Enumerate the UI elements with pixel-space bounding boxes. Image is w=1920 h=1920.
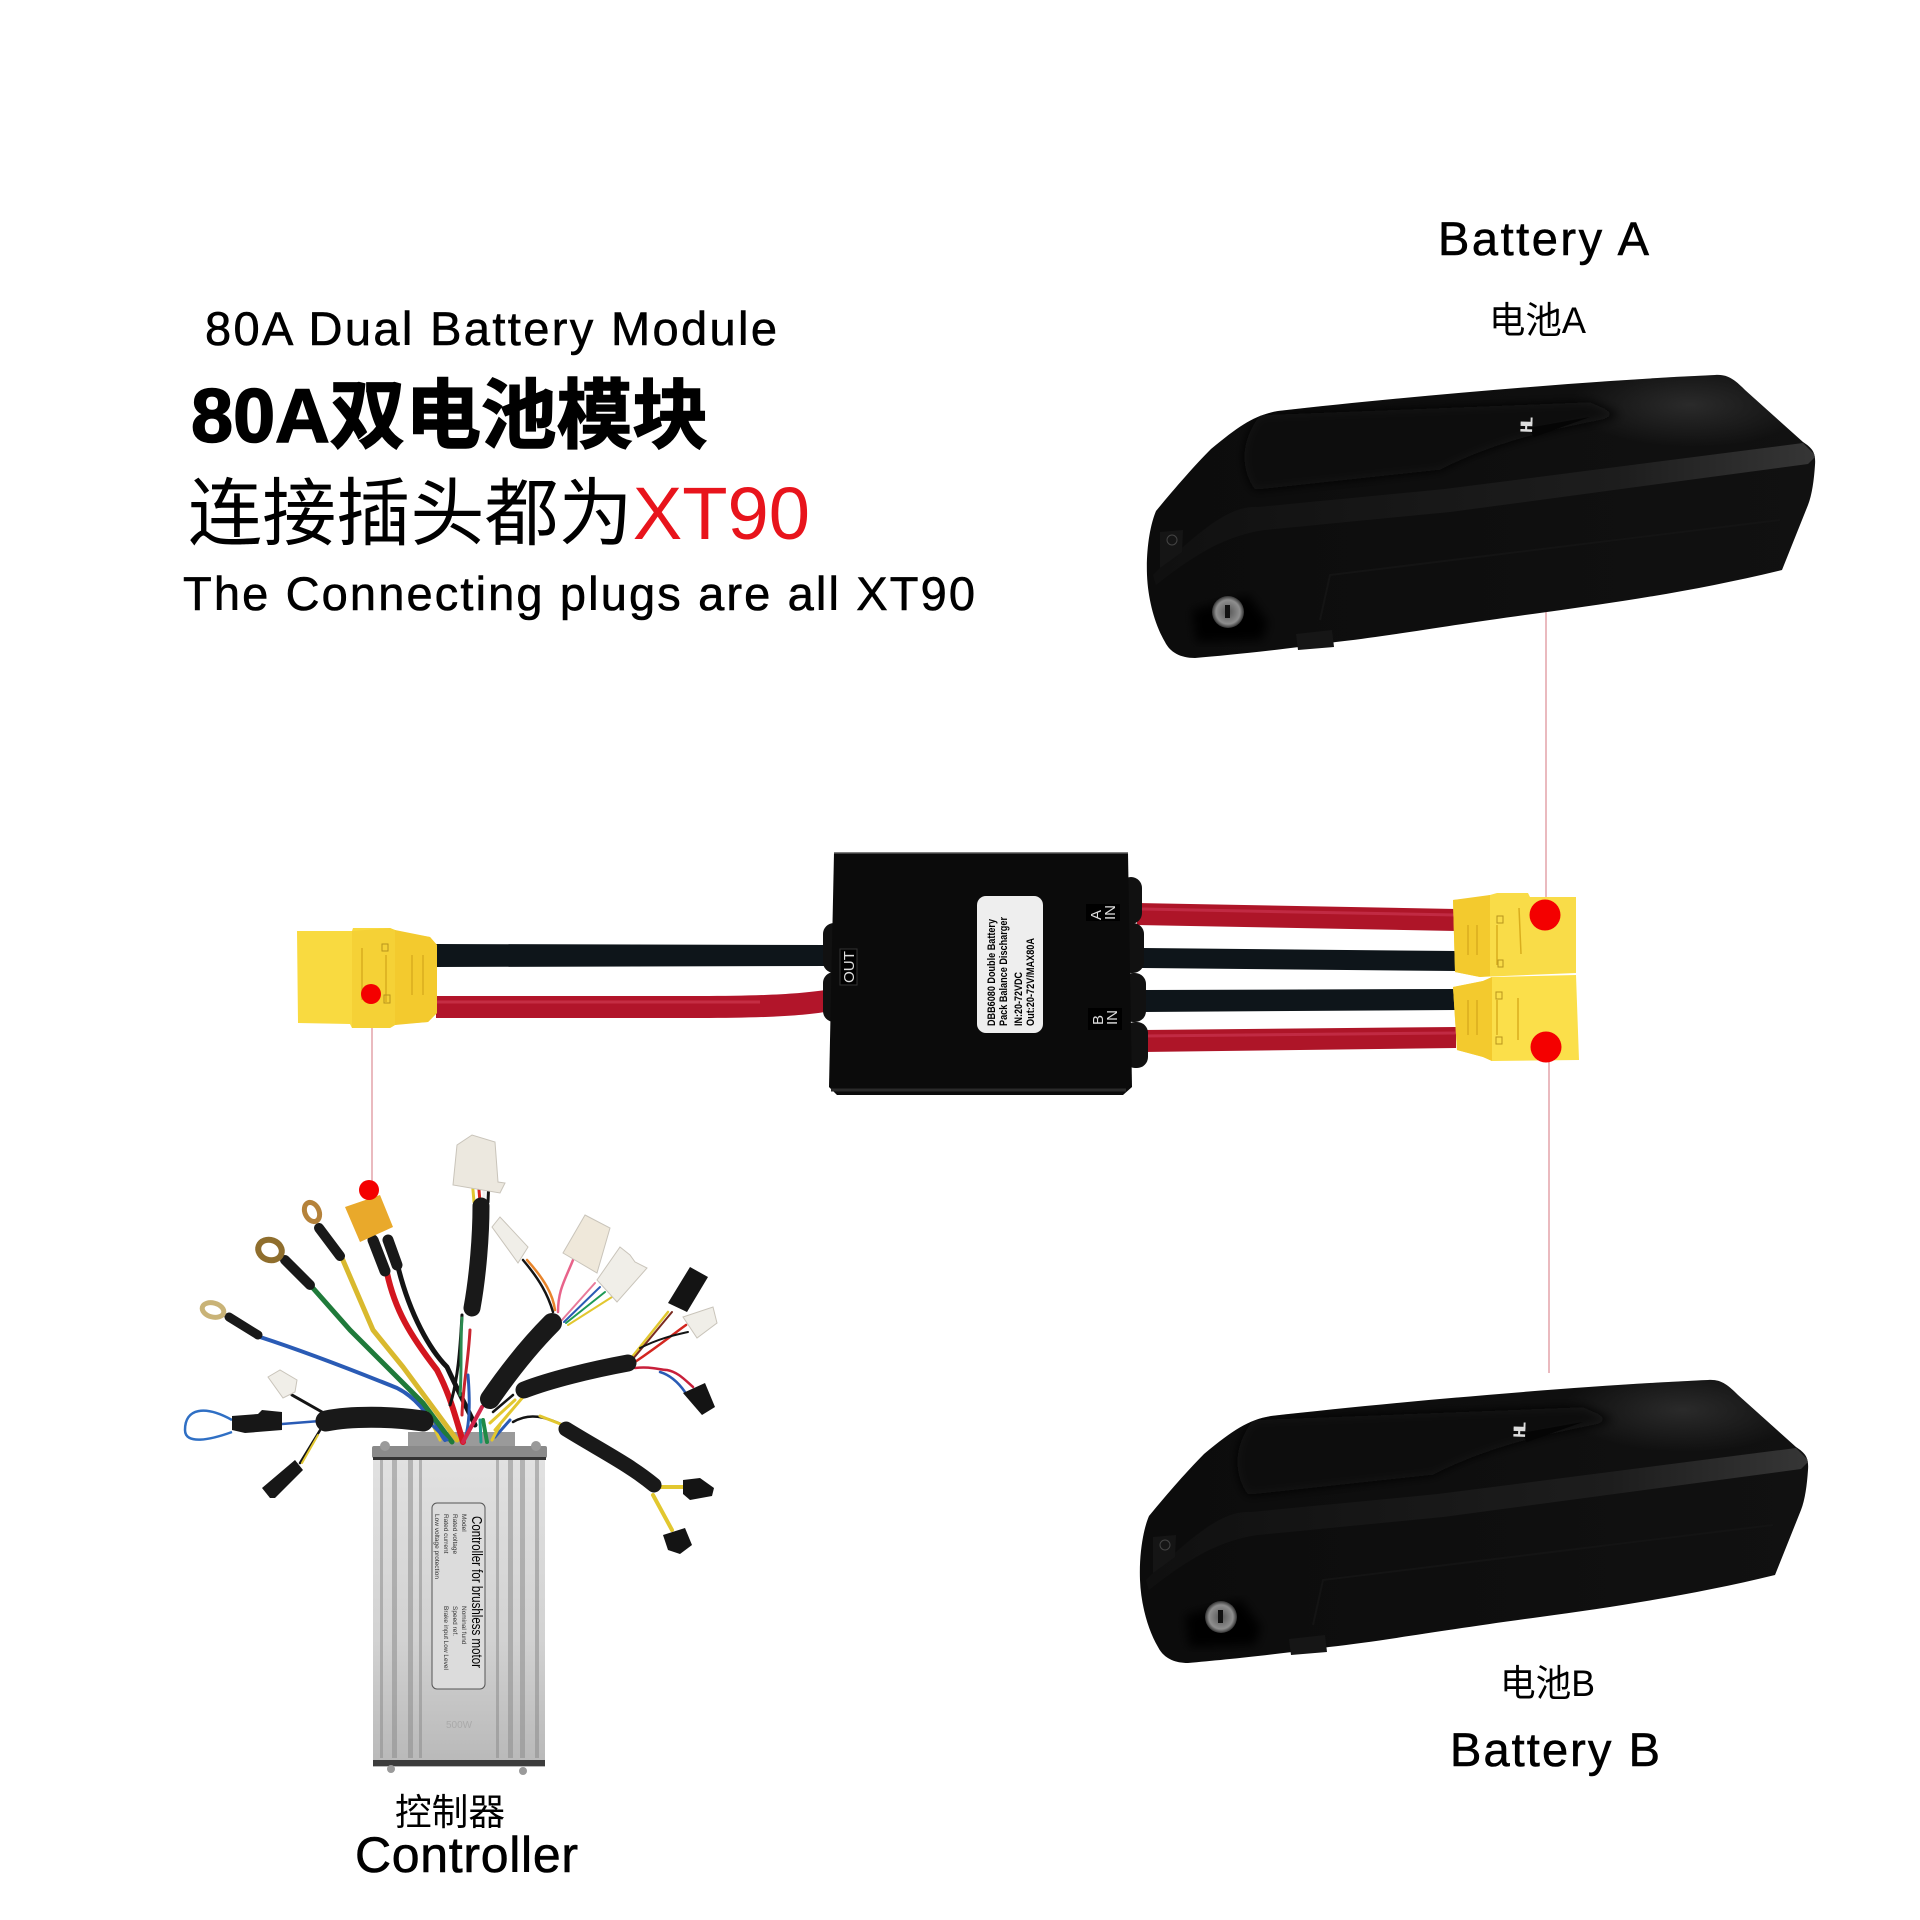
black connector: right top (668, 1267, 708, 1312)
controller with wire harness (185, 1135, 717, 1775)
product label: Out:20-72V/MAX80A (1025, 938, 1037, 1026)
black wire A (1140, 948, 1456, 971)
module casing (829, 853, 1132, 1095)
blue wire loop (185, 1411, 232, 1440)
chinese plug note: 连接插头都为XT90 (188, 472, 810, 555)
english subtitle: 80A Dual Battery Module (205, 302, 777, 355)
tag: A IN: A (1088, 910, 1105, 920)
product label: DBB6080 Double Battery (986, 918, 998, 1026)
battery B (1140, 1368, 1809, 1663)
tag: A IN: IN (1102, 905, 1119, 920)
label: controller english: Controller (355, 1827, 578, 1883)
label: Battery B english: Battery B (1450, 1723, 1660, 1776)
top plate (372, 1446, 547, 1458)
lower right wires (658, 1485, 685, 1489)
black output wire (436, 944, 825, 967)
black connector: lower right A (683, 1478, 714, 1500)
left small wires (282, 1421, 320, 1424)
spec label: Controller for brushless motor (468, 1516, 485, 1668)
red output wire (436, 990, 825, 1018)
spec label: Low voltage protection (433, 1514, 440, 1579)
power and phase wires (260, 1178, 693, 1530)
ring terminals (201, 1200, 323, 1320)
spec label (432, 1503, 485, 1689)
bottom plate (373, 1760, 545, 1766)
beige connector (563, 1215, 610, 1273)
black connector: right mid (683, 1383, 715, 1415)
connection dot (361, 984, 381, 1004)
battery XT connector (345, 1195, 393, 1242)
chinese bold title: 80A双电池模块 (191, 374, 708, 459)
plug B (1453, 975, 1579, 1061)
connector line: output plug to controller (371, 1000, 373, 1190)
white connector: small mid (492, 1217, 528, 1263)
right connector wires (632, 1312, 668, 1357)
connection dot B (1530, 1032, 1562, 1062)
stamped text: 500W (446, 1720, 473, 1731)
fan wires (463, 1407, 482, 1442)
input grommets (1120, 877, 1148, 1068)
spec label: Nominal fund (460, 1606, 467, 1645)
black wire B (1140, 989, 1456, 1012)
label: Battery B chinese: 电池B (1500, 1663, 1595, 1704)
label: Battery A english: Battery A (1438, 212, 1650, 265)
spec label: Brake input Low Level (442, 1606, 449, 1671)
product label: IN:20-72VDC (1013, 972, 1025, 1026)
top-right connector wires (523, 1260, 553, 1312)
black connector: lower left (262, 1460, 303, 1498)
plug A (1453, 893, 1576, 977)
hall wires (450, 1315, 462, 1405)
output cables (436, 944, 825, 1018)
XT90 plug: output (297, 928, 437, 1028)
red power wire (387, 1273, 463, 1442)
label: controller chinese: 控制器 (395, 1792, 505, 1833)
white connector: multi-pin (597, 1247, 647, 1302)
black power wire (398, 1267, 475, 1425)
white connector: top (453, 1135, 505, 1193)
tag: B IN: IN (1104, 1010, 1121, 1025)
white connector: right (683, 1307, 717, 1338)
connector line: Battery A to module plug (1545, 612, 1547, 900)
controller casing (372, 1441, 547, 1775)
product label (977, 896, 1043, 1033)
output grommets (823, 923, 845, 973)
XT90 plug pair: inputs (1453, 893, 1579, 1062)
tag: B IN: B (1090, 1015, 1107, 1025)
connector line: module plug to Battery B (1548, 1060, 1550, 1373)
bracket behind wires (408, 1432, 515, 1450)
spec label: Rated current (442, 1514, 449, 1554)
tag: B IN (1088, 1008, 1122, 1030)
heat-shrink sleeves (229, 1206, 654, 1485)
battery A (1147, 363, 1816, 658)
input cables (1137, 903, 1456, 1052)
tag: OUT: OUT (841, 951, 858, 983)
connection dot A (1530, 900, 1560, 930)
black connector: lower right B (663, 1528, 692, 1554)
blue phase wire (260, 1337, 445, 1440)
black connector: left (232, 1410, 282, 1433)
spec label: Speed ref. (451, 1606, 458, 1636)
spec label: Rated voltage (451, 1514, 458, 1554)
label: Battery A chinese: 电池A (1489, 300, 1586, 341)
white connector: left (268, 1370, 297, 1398)
product label: Pack Balance Discharger (998, 916, 1010, 1026)
spec label: Model (460, 1514, 467, 1532)
yellow phase wire (342, 1258, 457, 1440)
red wire A (1137, 903, 1456, 931)
green phase wire (312, 1287, 452, 1442)
mounting screws (380, 1441, 541, 1775)
title block (183, 302, 975, 620)
controller connection dot (359, 1180, 379, 1200)
top connector wires (472, 1178, 474, 1202)
dual battery module box (823, 853, 1148, 1095)
red wire B (1140, 1027, 1456, 1052)
tag: A IN (1086, 904, 1120, 921)
english plug note: The Connecting plugs are all XT90 (183, 567, 975, 620)
